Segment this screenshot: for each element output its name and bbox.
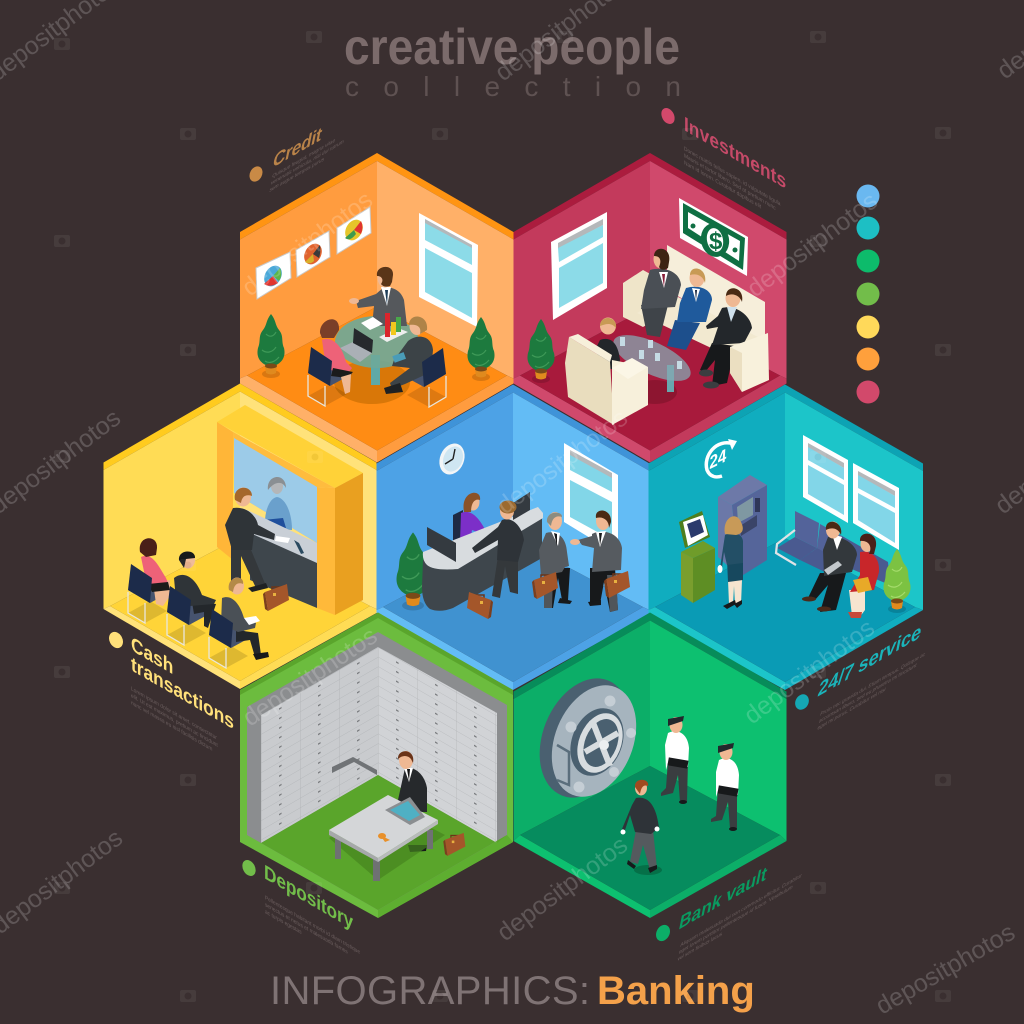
pulled out drawer xyxy=(332,757,377,775)
safe deposit boxes right xyxy=(378,647,497,843)
panel: depository room xyxy=(240,612,513,918)
teller behind glass xyxy=(263,477,292,530)
label: depository: Pellentesque habitant morbi id diam tristique xyxy=(265,895,360,956)
briefcase xyxy=(263,584,289,611)
label: investments xyxy=(659,106,786,222)
touch kiosk xyxy=(679,511,715,603)
label: cash transactions: Cash xyxy=(131,633,173,679)
banker standing xyxy=(349,267,407,326)
table xyxy=(329,795,445,881)
watermarks: depositphotos xyxy=(742,187,883,303)
client woman and chair xyxy=(308,319,353,406)
vault door xyxy=(523,665,652,811)
label: bank vault: Aliquam malesuada dui non commodo efficitur. Curabitur xyxy=(680,873,802,949)
label: credit: Quisque feugiat, magna vitae xyxy=(272,138,336,180)
meeting table xyxy=(334,316,419,404)
watermarks: depositphotos xyxy=(871,918,1020,1020)
briefcase on floor xyxy=(467,592,493,619)
woman at ATM xyxy=(718,516,743,609)
watermarks: depositphotos xyxy=(492,831,633,947)
armchair with client xyxy=(565,318,648,425)
briefcase xyxy=(443,833,465,856)
label: credit xyxy=(247,123,346,194)
seated man in black xyxy=(167,551,216,645)
waiting bench xyxy=(776,511,890,585)
label: investments: Investments xyxy=(684,113,786,194)
label: credit: venenatis vehicula, nisi dui rutrum xyxy=(270,139,345,187)
label: investments: Donec mattis tellus sapien, id vulputate ligula xyxy=(684,146,781,208)
customer at desk xyxy=(472,500,524,598)
seated man reading xyxy=(209,578,269,668)
seated investor in grey xyxy=(641,249,681,337)
label: depository: ac turpis egestas xyxy=(265,909,302,936)
items on table xyxy=(340,313,408,362)
label: 24/7 service: 24/7 service xyxy=(816,620,924,702)
windows xyxy=(803,435,899,550)
panel: 24/7 service room xyxy=(648,384,923,690)
walking client xyxy=(620,780,662,875)
safe deposit boxes left xyxy=(261,647,378,843)
window xyxy=(564,443,618,555)
plant xyxy=(397,532,429,610)
panel: credit room xyxy=(240,153,514,462)
label: depository: senectus et netus et malesuada fames xyxy=(265,902,348,956)
label: investments: Mauris et tortor libero. Sed at pretium nunc xyxy=(684,153,776,212)
colour legend dots xyxy=(856,184,880,404)
customer at counter xyxy=(225,488,290,592)
window xyxy=(419,213,478,327)
bottom heading: INFOGRAPHICS: xyxy=(270,969,590,1013)
label: 24/7 service: eget mi purus. Curabitur vel nisi xyxy=(817,687,886,732)
watermarks: depositphotos xyxy=(237,186,378,302)
title: creative people collection: collection xyxy=(345,71,681,102)
label: bank vault: eget lorem porttitor pellentesque id fusce. Vestibulum xyxy=(678,884,793,956)
guard one xyxy=(661,716,689,804)
receptionist xyxy=(453,493,486,542)
label: bank vault: Bank vault xyxy=(677,863,769,935)
24 hour icon: 24 xyxy=(707,445,728,473)
label: bank vault: vel sem finibus lacus xyxy=(677,931,723,963)
seated investor in black xyxy=(699,288,752,388)
panel: cash transactions room xyxy=(104,384,376,689)
coffee table xyxy=(607,326,697,404)
waiting woman xyxy=(848,534,879,618)
sofa arm xyxy=(730,333,769,392)
plant xyxy=(527,319,555,383)
title: creative people collection: creative people xyxy=(344,19,680,75)
panel: investments room xyxy=(514,153,786,462)
label: 24/7 service xyxy=(793,620,926,732)
guard two xyxy=(711,743,739,831)
panel: bank vault room xyxy=(514,612,786,918)
label: cash transactions: transactions xyxy=(131,653,234,734)
safe deposit wall frame xyxy=(247,632,507,910)
panel: reception room xyxy=(376,384,650,690)
label: 24/7 service: Proin nec gravida dui. Etiam tempus. Quisque ac xyxy=(820,651,926,718)
attendant xyxy=(398,751,427,852)
pie chart posters xyxy=(256,207,371,299)
seated investor in blue xyxy=(667,268,712,350)
plant xyxy=(883,549,911,613)
label: cash transactions: elit. Ut est maximus, pretium ac tincidunt xyxy=(131,693,218,749)
reception desk xyxy=(422,492,543,611)
label: investments: Nam id lorem. Curabitur dapibus elit xyxy=(684,160,761,211)
waiting man xyxy=(802,522,857,612)
counter xyxy=(247,510,317,608)
label: credit: sem augue tempus purus xyxy=(269,156,325,194)
man with briefcase facing right xyxy=(532,512,572,608)
dollar bill poster: $ xyxy=(709,228,723,255)
ATM machine xyxy=(718,475,767,577)
client man and chair xyxy=(384,316,446,407)
seated woman xyxy=(128,538,172,623)
title: creative people collection xyxy=(344,19,681,102)
teller booth xyxy=(217,405,363,615)
label: cash transactions: nunc vel massa eu nisl facilisis dictum xyxy=(131,700,213,753)
label: credit: Credit xyxy=(271,123,324,173)
sofa xyxy=(623,245,768,363)
label: 24/7 service: accumsan libero, sed eu pharetra mi tincidunt xyxy=(818,662,917,725)
floor xyxy=(247,775,507,910)
bottom heading: Banking xyxy=(597,969,755,1013)
wall clock xyxy=(435,440,469,478)
watermarks: depositphotos xyxy=(492,404,633,520)
label: cash transactions: Lorem ipsum dolor sit amet, consectetur xyxy=(131,686,217,742)
watermarks: depositphotos xyxy=(739,614,880,730)
label: cash transactions xyxy=(106,629,234,756)
label: depository: Depository xyxy=(264,861,353,935)
plants xyxy=(257,314,495,381)
label: depository xyxy=(240,858,360,970)
window xyxy=(551,212,607,320)
man with briefcase facing left xyxy=(570,511,630,612)
24 hour icon xyxy=(706,439,737,477)
label: bank vault xyxy=(653,863,802,963)
dollar bill poster xyxy=(679,198,748,276)
watermarks: depositphotos xyxy=(238,622,382,732)
